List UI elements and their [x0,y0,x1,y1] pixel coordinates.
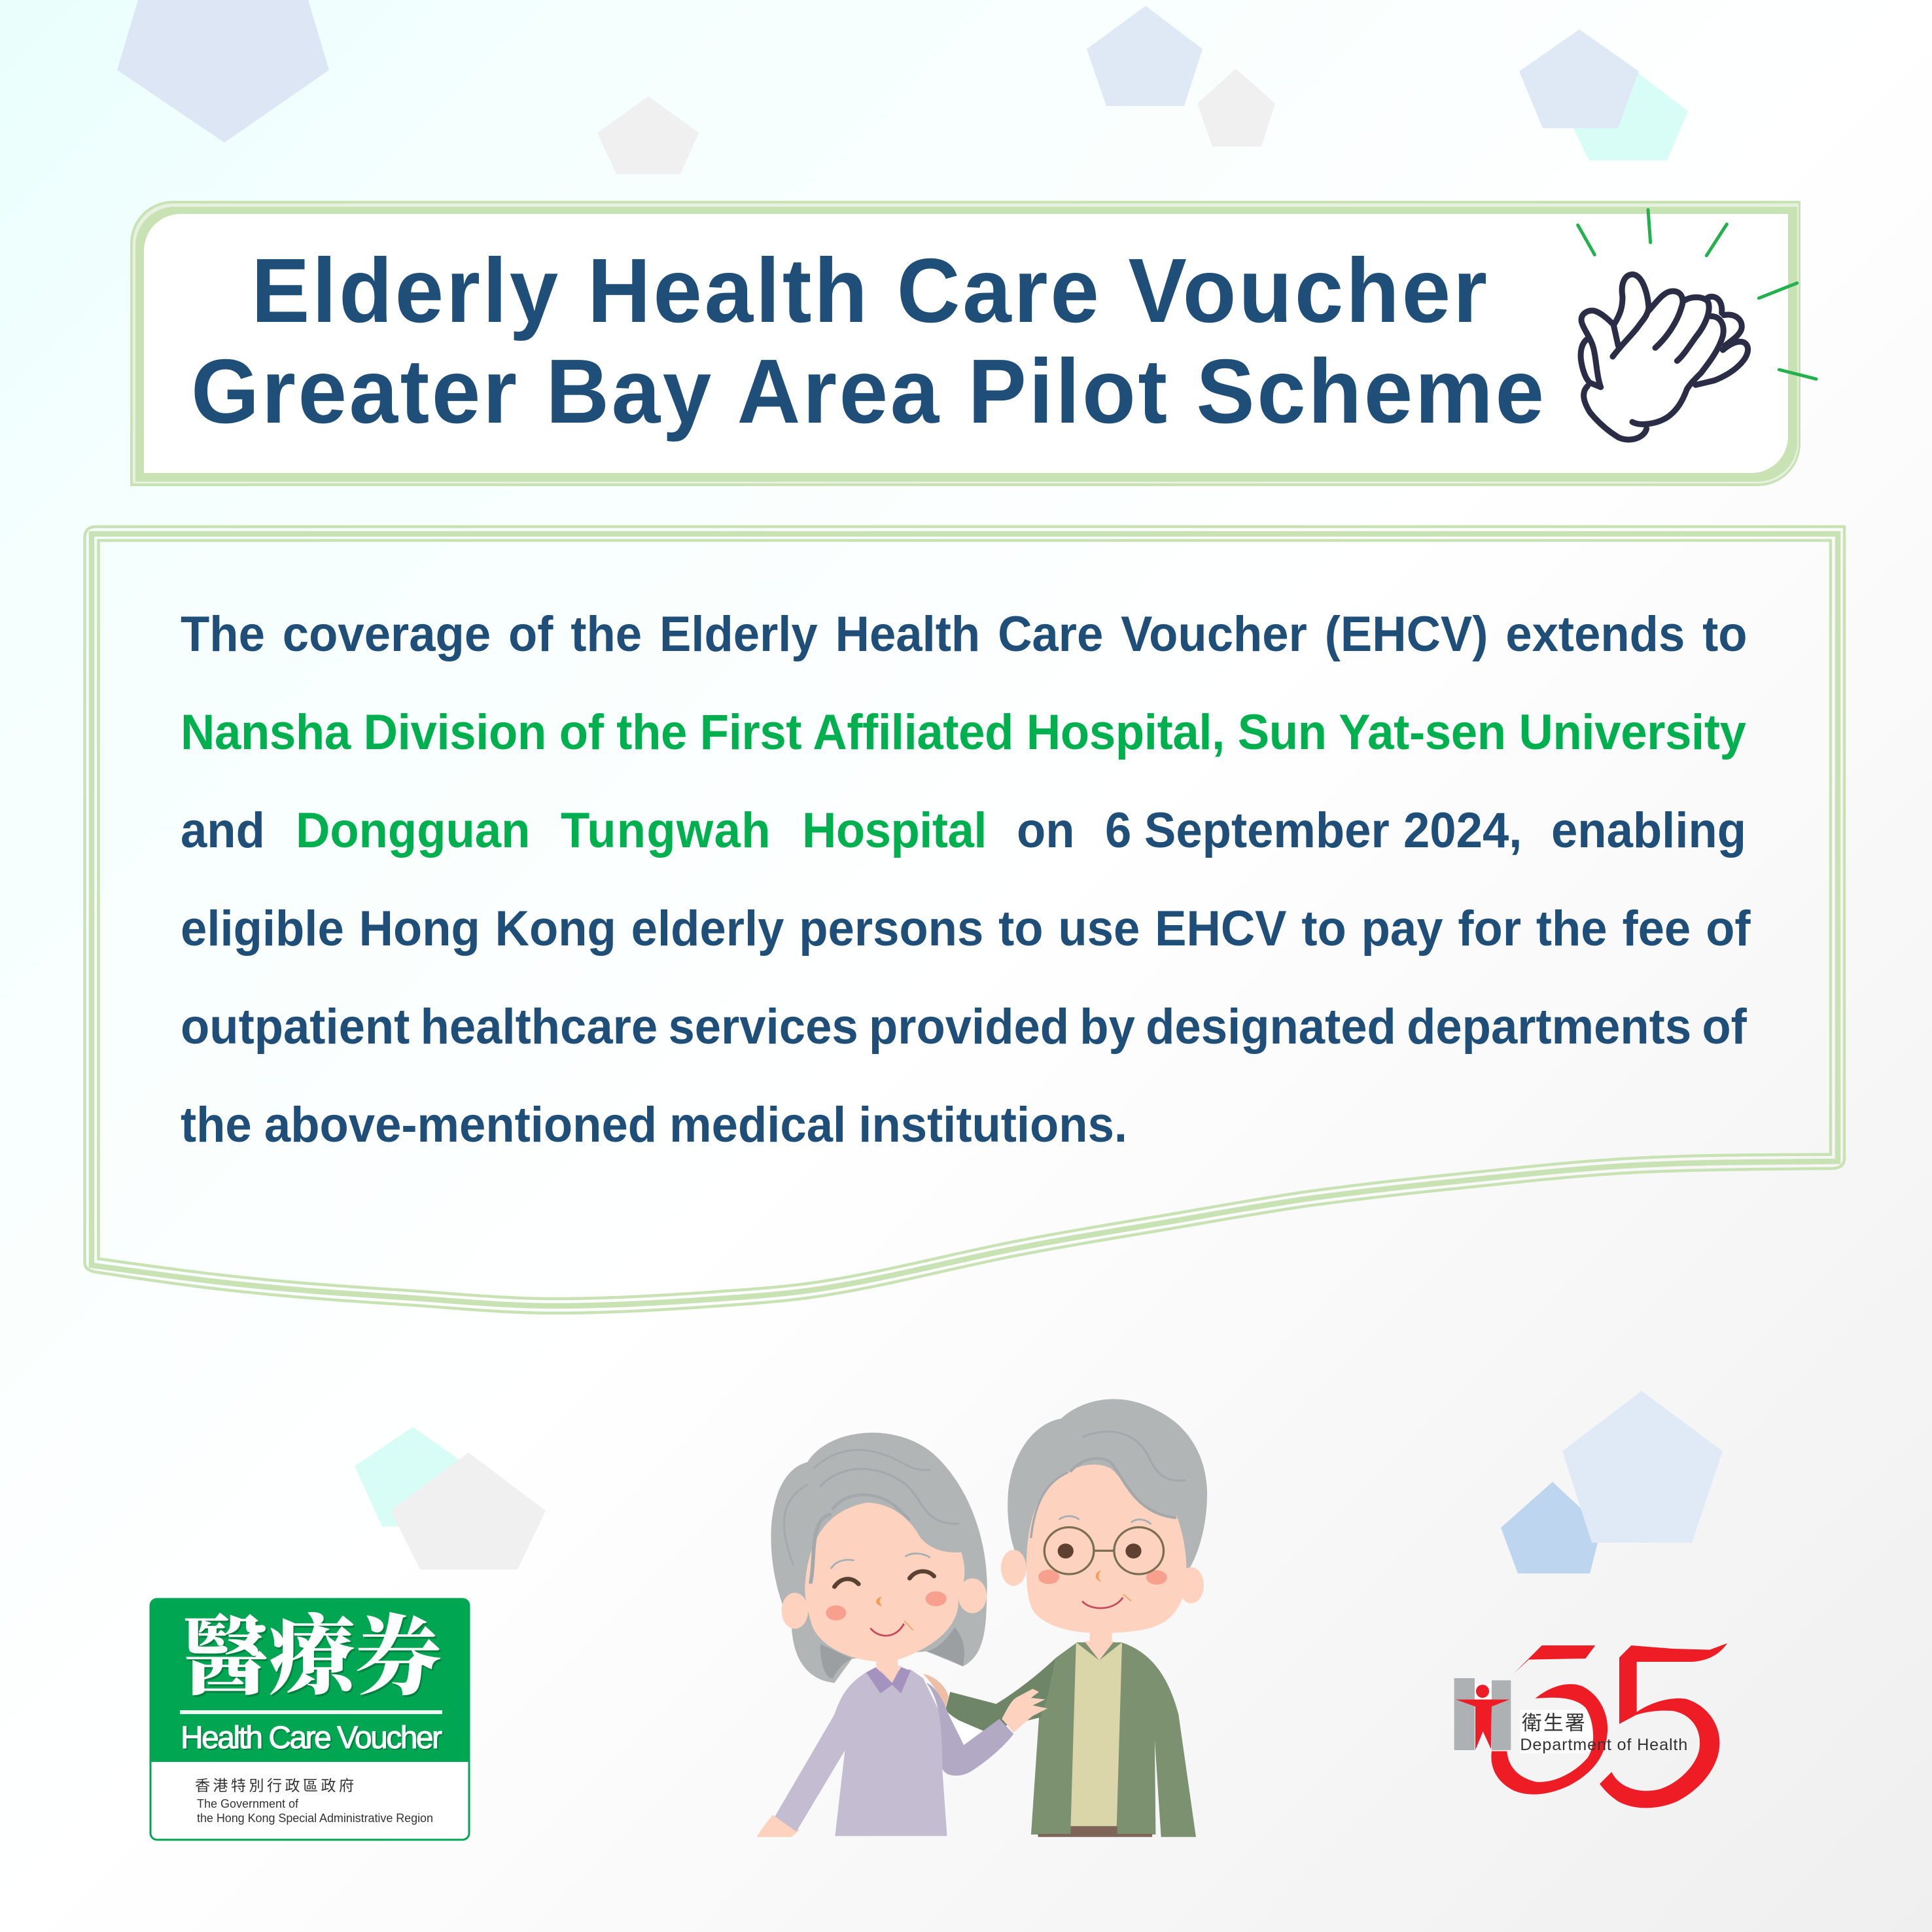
logo: Health Care Voucher: 香港特別行政區政府 [195,1777,354,1794]
logo: Health Care Voucher: 醫療券 [183,1587,442,1712]
text block: EHCV coverage description: Hospital [802,802,987,858]
title text: Greater Bay Area Pilot Scheme [191,340,1544,442]
logo: Health Care Voucher [150,1587,469,1840]
text block: EHCV coverage description: enabling [1551,802,1746,858]
background pentagons [117,0,1723,1573]
text block: EHCV coverage description: the above-mentioned medical institutions. [181,1097,1127,1152]
text block: EHCV coverage description: 6 [1105,802,1131,858]
text block: EHCV coverage description: Tungwah [561,802,771,858]
text block: EHCV coverage description: The coverage of the Elderly Health Care Voucher (EHCV) extends to [181,606,1748,661]
man [923,1399,1207,1837]
panel: description frame [85,527,1844,1313]
text block: EHCV coverage description: eligible Hong Kong elderly persons to use EHCV to pay for the fee of [181,900,1751,956]
text block: EHCV coverage description: 2024, [1403,802,1522,858]
logo: Department of Health 35th anniversary [1454,1643,1727,1808]
text block: EHCV coverage description: and [181,802,265,858]
text block: EHCV coverage description [181,606,1751,1152]
icon: clapping hands [1578,210,1816,440]
panel: title banner [130,201,1816,486]
title text: Elderly Health Care Voucher [251,239,1487,342]
woman [757,1433,1047,1837]
logo: Department of Health 35th anniversary: 衛生署 [1522,1712,1585,1734]
text block: EHCV coverage description: Dongguan [296,802,530,858]
text block: EHCV coverage description: on [1017,802,1075,858]
illustration: elderly couple [757,1399,1207,1837]
title text [191,239,1544,442]
text block: EHCV coverage description: outpatient healthcare services provided by designated departments of [181,998,1747,1054]
logo: Health Care Voucher: Health Care Voucher [181,1721,442,1755]
logo: Health Care Voucher: The Government of [197,1797,299,1810]
text block: EHCV coverage description: September [1144,802,1390,858]
text block: EHCV coverage description: Nansha Division of the First Affiliated Hospital, Sun Yat-sen University [181,704,1746,760]
logo: Department of Health 35th anniversary: Department of Health [1520,1736,1687,1754]
logo: Health Care Voucher: the Hong Kong Special Administrative Region [197,1812,433,1825]
